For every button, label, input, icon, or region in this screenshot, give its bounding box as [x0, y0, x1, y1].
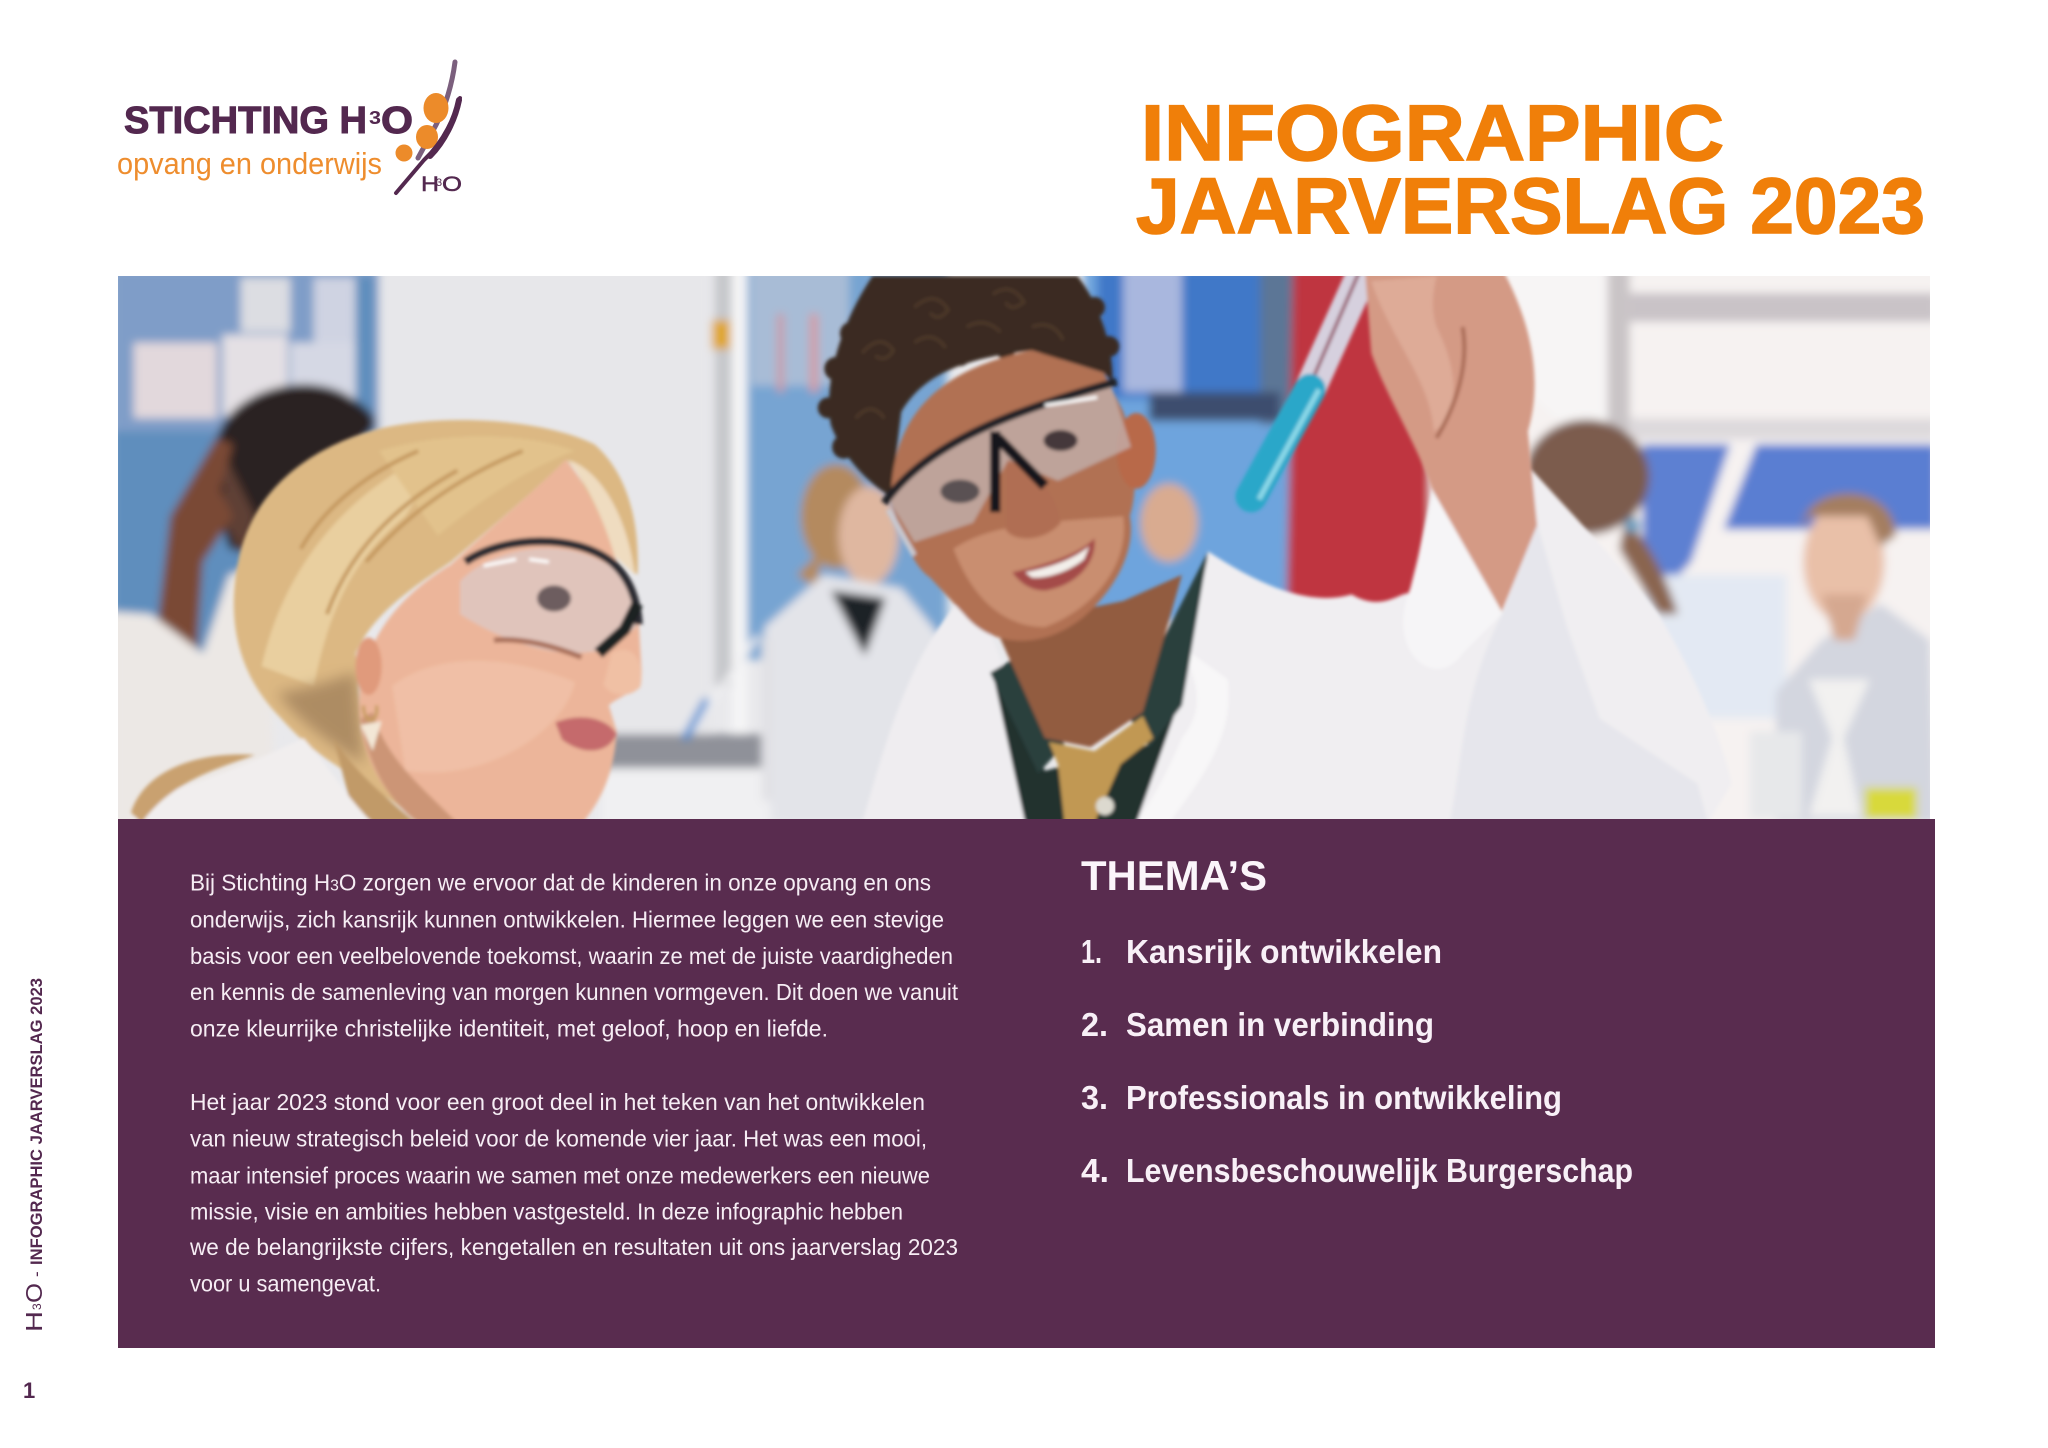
boy hair: [829, 276, 1113, 497]
intro text block: maar intensief proces waarin we samen met onze medewerkers een nieuwe: [190, 1162, 930, 1188]
background child: dark hair, raised hand: [216, 384, 375, 555]
title: [1136, 88, 1925, 250]
page number: 1: [23, 1378, 35, 1403]
girl goggles: [460, 548, 636, 653]
logo wordmark: 3: [369, 108, 381, 128]
boy hand and forearm: [1365, 268, 1537, 611]
intro text block: [189, 870, 959, 1297]
panel: introduction and themes: [118, 819, 1935, 1348]
background child: boy right: [1776, 604, 1937, 823]
girl hair shadow at nape: [277, 673, 363, 764]
logo wordmark: STICHTING H: [124, 100, 367, 142]
title: JAARVERSLAG 2023: [1136, 161, 1925, 250]
logo tagline: opvang en onderwijs: [117, 146, 382, 181]
intro text block: Het jaar 2023 stond voor een groot deel in het teken van het ontwikkelen: [190, 1089, 925, 1115]
side label: H3O - Infographic Jaarverslag 2023: H: [21, 1311, 47, 1332]
intro text block: basis voor een veelbelovende toekomst, waarin ze met de juiste vaardigheden: [190, 943, 953, 969]
side label: H3O - Infographic Jaarverslag 2023: -: [27, 1271, 46, 1277]
logo mark: brush strokes and dots: 3: [436, 177, 442, 189]
background pipette: [686, 636, 758, 738]
theme items: 3.: [1081, 1079, 1108, 1116]
theme items: [1081, 933, 1633, 1189]
intro text block: we de belangrijkste cijfers, kengetallen en resultaten uit ons jaarverslag 2023: [189, 1234, 958, 1260]
girl hair: [234, 420, 638, 823]
background child: girl right: [1524, 420, 1649, 534]
themes heading: THEMA’S: [1081, 852, 1267, 899]
boy hair curls: [818, 292, 1119, 459]
theme items: Samen in verbinding: [1126, 1006, 1434, 1043]
boy nose: [1006, 457, 1061, 538]
girl lab coat: [131, 738, 373, 823]
logo mark: brush strokes and dots: O: [442, 173, 462, 196]
title: INFOGRAPHIC: [1141, 88, 1724, 177]
girl mouth: [555, 717, 617, 751]
girl ear: [356, 638, 382, 695]
boy shirt and collar: [993, 555, 1208, 823]
boy smile: [1012, 538, 1095, 591]
theme items: 2.: [1081, 1006, 1108, 1043]
theme items: 4.: [1081, 1152, 1109, 1189]
intro text block: en kennis de samenleving van morgen kunnen vormgeven. Dit doen we vanuit: [190, 979, 959, 1005]
boy with goggles, lab coat and raised test tube: [818, 268, 1732, 823]
themes list: [1081, 852, 1633, 1189]
side label: H3O - Infographic Jaarverslag 2023: INFOGRAPHIC JAARVERSLAG 2023: [27, 978, 46, 1265]
intro text block: onze kleurrijke christelijke identiteit, met geloof, hoop en liefde.: [190, 1016, 828, 1042]
background glassware: [1809, 679, 1870, 816]
boy lab coat: [862, 588, 1032, 823]
girl nose: [604, 650, 642, 695]
boy ear: [1117, 413, 1156, 489]
theme items: Levensbeschouwelijk Burgerschap: [1126, 1152, 1633, 1189]
photo: children doing a science experiment with goggles and test tube: [118, 276, 1930, 819]
intro text block: missie, visie en ambities hebben vastgesteld. In deze infographic hebben: [190, 1198, 903, 1224]
theme items: Kansrijk ontwikkelen: [1126, 933, 1442, 970]
boy goggles: [888, 382, 1131, 542]
boy neck: [995, 575, 1182, 747]
logo mark: brush strokes and dots: H: [421, 173, 439, 196]
intro text block: onderwijs, zich kansrijk kunnen ontwikkelen. Hiermee leggen we een stevige: [190, 906, 944, 932]
girl earring: [363, 705, 377, 720]
intro text block: van nieuw strategisch beleid voor de komende vier jaar. Het was een mooi,: [190, 1126, 927, 1152]
girl with goggles: [131, 420, 642, 823]
girl face: [359, 460, 642, 823]
side label: H3O - Infographic Jaarverslag 2023: O: [21, 1283, 47, 1303]
theme items: 1.: [1081, 933, 1102, 970]
side label: H3O - Infographic Jaarverslag 2023: [21, 978, 47, 1332]
side label: H3O - Infographic Jaarverslag 2023: 3: [30, 1303, 44, 1310]
boy face: [891, 350, 1135, 641]
intro text block: voor u samengevat.: [190, 1271, 381, 1297]
test tube: [1310, 268, 1365, 390]
logo: Stichting H3O: [117, 60, 462, 196]
background person: woman in lab coat: [801, 464, 871, 568]
intro text block: Bij Stichting H3O zorgen we ervoor dat de kinderen in onze opvang en ons: [190, 870, 931, 896]
logo wordmark: O: [381, 100, 413, 142]
logo mark: brush strokes and dots: [396, 62, 462, 196]
theme items: Professionals in ontwikkeling: [1126, 1079, 1562, 1116]
girl hair highlight at temple: [568, 460, 635, 575]
photo background: [111, 268, 1939, 829]
